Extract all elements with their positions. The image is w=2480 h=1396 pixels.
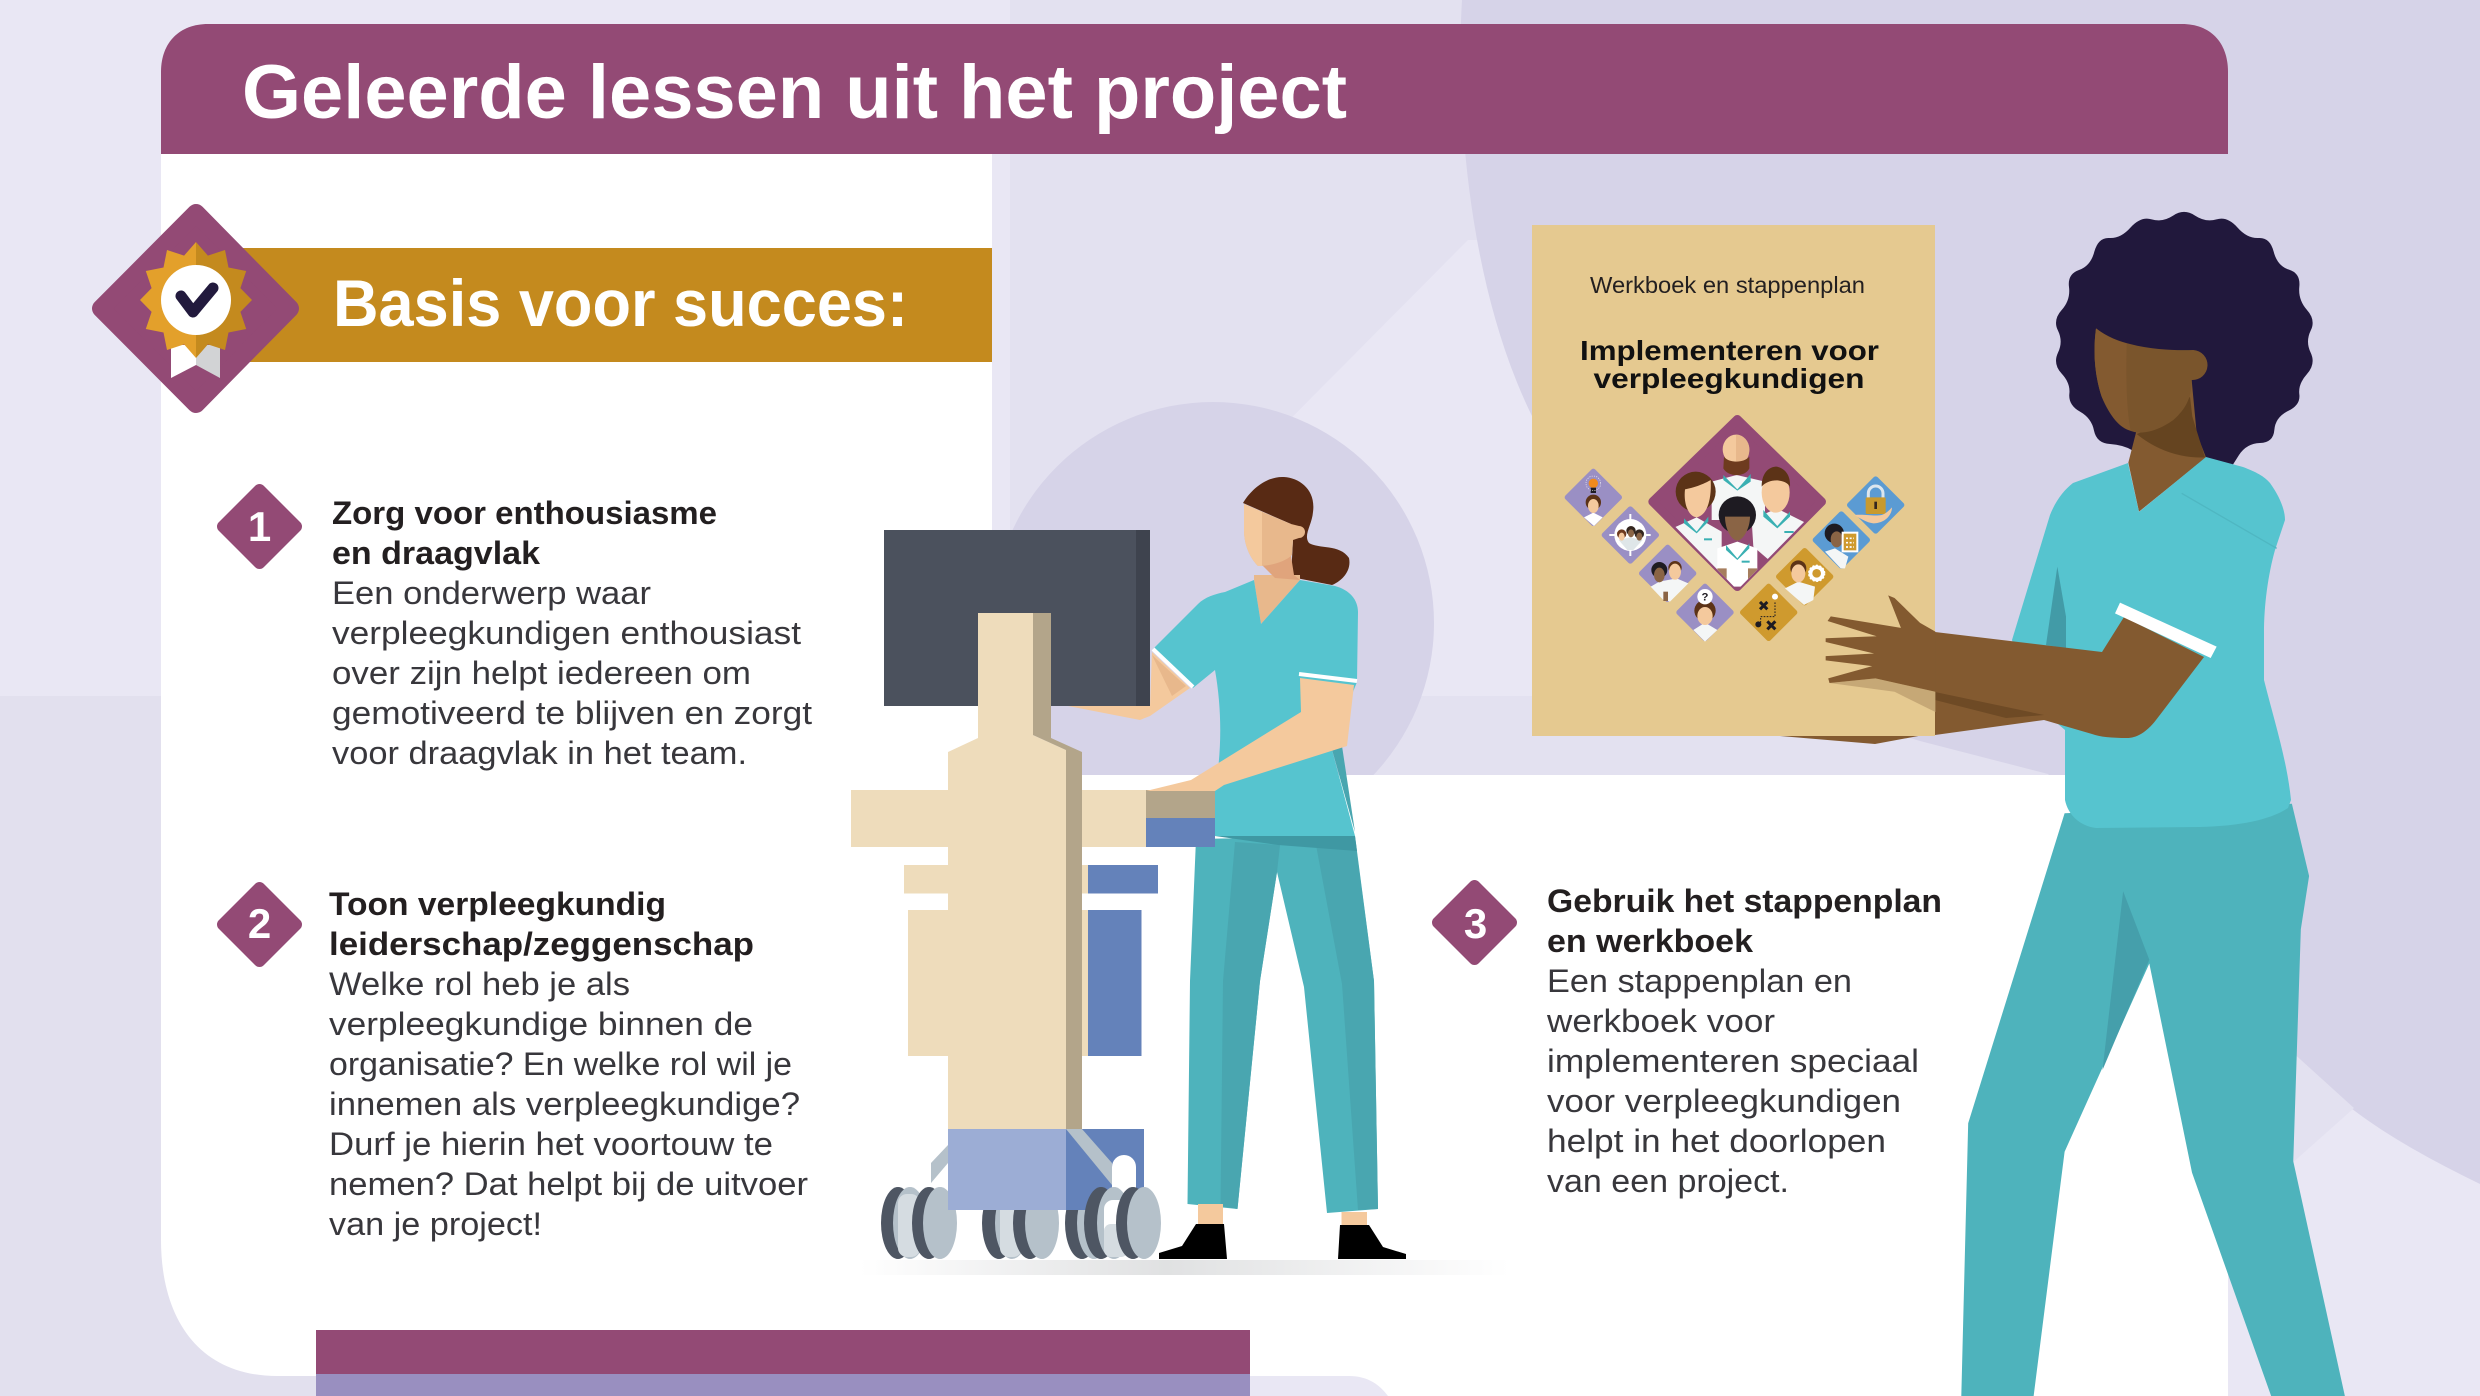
item 1 text: gemotiveerd te blijven en zorgt: [332, 695, 812, 731]
floor shadow: [860, 1260, 1510, 1275]
illustration: ultrasound cart: [851, 530, 1161, 1259]
item 1 text: verpleegkundigen enthousiast: [332, 615, 801, 651]
cart base: [931, 1129, 1144, 1210]
icon: question nurse: ?: [1702, 592, 1709, 604]
icon: nurse with gear: [1785, 560, 1825, 605]
book title: [1580, 335, 1879, 394]
book label: Werkboek en stappenplan: [1590, 272, 1865, 298]
illustration: nurse holding book: [1532, 212, 2345, 1396]
head and neck: [2094, 328, 2208, 512]
item 1 text: voor draagvlak in het team.: [332, 735, 747, 771]
scrub top: [2012, 457, 2291, 828]
icon: two nurses: [1651, 561, 1688, 602]
number badge 3: [1438, 886, 1511, 959]
icon: medal badge: [101, 213, 290, 404]
arm shadow: [1935, 692, 2044, 718]
large team diamond: [1653, 419, 1822, 587]
right forearm: [1146, 674, 1357, 791]
left forearm: [1068, 649, 1193, 720]
book cover: [1532, 225, 1935, 736]
hair: [1243, 477, 1349, 585]
pants: [1188, 836, 1378, 1213]
ankles and shoes: [1159, 1204, 1406, 1259]
item 3: [1438, 883, 1942, 1199]
hand on book: [1826, 595, 1935, 712]
number badge 2: 2: [248, 900, 271, 947]
item 3 text: implementeren speciaal: [1547, 1043, 1919, 1079]
item 2 text: innemen als verpleegkundige?: [329, 1086, 800, 1122]
sleeve band: [2115, 603, 2217, 658]
item 2: [223, 886, 808, 1242]
bottom section bars: [316, 1330, 1250, 1396]
neck: [1254, 575, 1300, 624]
icon: question nurse: [1693, 589, 1717, 642]
front caster: [1084, 1155, 1161, 1259]
pants shade: [2102, 891, 2149, 1070]
item 3 text: [1546, 883, 1942, 1199]
illustration: nurse at cart: [1068, 477, 1406, 1259]
item 3 text: Gebruik het stappenplan: [1547, 883, 1942, 919]
number badge 3: 3: [1464, 900, 1487, 947]
book title: verpleegkundigen: [1594, 363, 1864, 394]
item 1: [223, 490, 812, 771]
number badge 1: 1: [248, 503, 271, 550]
item 3 text: van een project.: [1547, 1163, 1789, 1199]
title bar: [161, 24, 2228, 154]
monitor: [884, 530, 1150, 706]
arm holding book: [1935, 617, 2204, 738]
item 3 text: Een stappenplan en: [1547, 963, 1852, 999]
item 1 text: Een onderwerp waar: [332, 575, 651, 611]
section heading: basis voor succes: [240, 248, 992, 362]
title: Geleerde lessen uit het project: [242, 50, 1347, 135]
cart tray: [1146, 790, 1215, 847]
item 2 text: nemen? Dat helpt bij de uitvoer: [329, 1166, 808, 1202]
icon: target team: [1609, 514, 1651, 556]
small diamonds: [1567, 471, 1902, 638]
item 2 text: [329, 886, 808, 1242]
book title: Implementeren voor: [1580, 335, 1879, 366]
number badge 2: [223, 888, 296, 961]
book cover icons: [1567, 419, 1902, 642]
item 3 text: werkboek voor: [1546, 1003, 1775, 1039]
item 1 text: [332, 495, 812, 771]
icon: nurse with checklist: [1825, 524, 1858, 568]
item 2 text: Welke rol heb je als: [329, 966, 630, 1002]
cart column: [948, 613, 1082, 1129]
sleeve fold: [2046, 493, 2277, 648]
section heading: basis voor succes: Basis voor succes:: [333, 266, 908, 340]
item 1 text: en draagvlak: [332, 535, 540, 571]
item 3 text: voor verpleegkundigen: [1547, 1083, 1901, 1119]
item 3 text: en werkboek: [1547, 923, 1753, 959]
item 1 text: over zijn helpt iedereen om: [332, 655, 751, 691]
item 2 text: leiderschap/zeggenschap: [329, 926, 754, 962]
item 2 text: Toon verpleegkundig: [329, 886, 666, 922]
icon: route plan: [1755, 594, 1778, 629]
item 1 text: Zorg voor enthousiasme: [332, 495, 717, 531]
pants: [1961, 804, 2345, 1396]
scrub top: [1153, 580, 1358, 851]
item 3 text: helpt in het doorlopen: [1547, 1123, 1886, 1159]
item 2 text: organisatie? En welke rol wil je: [329, 1046, 792, 1082]
book hand underside: [1780, 725, 1940, 744]
number badge 1: [223, 490, 296, 563]
rear wheels: [881, 1187, 1111, 1259]
item 2 text: verpleegkundige binnen de: [329, 1006, 753, 1042]
afro hair: [2056, 212, 2313, 467]
cart side shelves: [851, 790, 1158, 1056]
icon: idea: [1584, 476, 1603, 526]
face: [1244, 504, 1305, 566]
item 2 text: Durf je hierin het voortouw te: [329, 1126, 773, 1162]
icon: lock in hand: [1854, 486, 1892, 523]
item 2 text: van je project!: [329, 1206, 542, 1242]
